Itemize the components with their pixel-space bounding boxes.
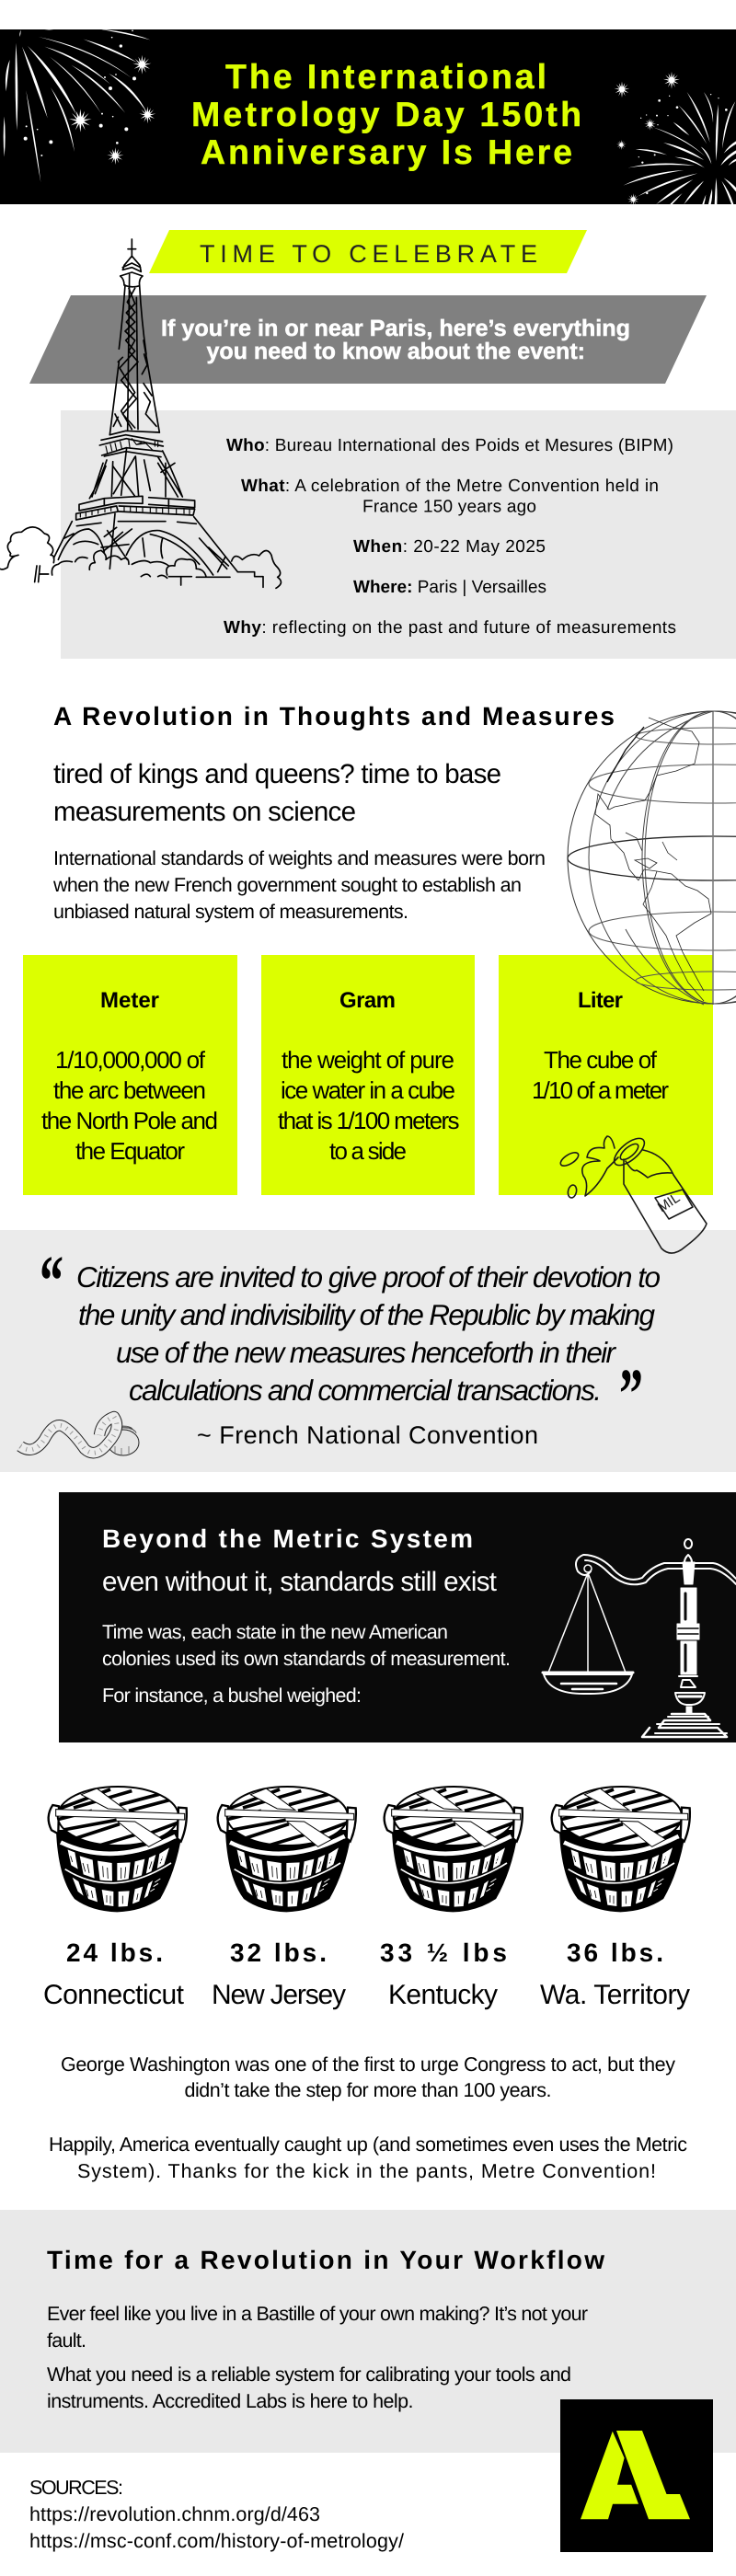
icon: milk bottle [558,1133,707,1253]
body text: Ever feel like you live in a Bastille of your own making? It’s not your [47,2303,588,2325]
icon: milk bottle: MIL [655,1190,683,1215]
body text: instruments. Accredited Labs is here to help. [47,2390,414,2412]
icon: basket new jersey [218,1787,356,1911]
card: meter: the Equator [75,1137,185,1165]
card: meter [23,955,237,1195]
washington territory [540,1938,690,2010]
latitude lines [568,728,736,990]
icon: basket connecticut [49,1787,187,1911]
new jersey: New Jersey [212,1980,346,2010]
quotation: Citizens are invited to give proof of their devotion to [76,1260,661,1294]
body text: fault. [47,2329,86,2352]
card: meter: the arc between [53,1076,206,1104]
icon: fireworks right [614,72,736,205]
icon: eiffel tower [0,239,281,588]
body text: International standards of weights and measures were born [53,847,546,869]
title: Anniversary Is Here [201,132,572,171]
icon: globe [568,711,736,1005]
card: meter: Meter [100,988,159,1013]
card: gram: Gram [339,988,396,1013]
card: gram: ice water in a cube [281,1076,455,1104]
card: gram: that is 1/100 meters [278,1107,460,1134]
panel: beyond the metric system [59,1492,736,1742]
card: liter: Liter [578,988,623,1013]
card: liter: The cube of [544,1046,658,1074]
text: george washington: didn’t take the step for more than 100 years. [184,2079,552,2101]
quotation: use of the new measures henceforth in their [116,1336,616,1369]
body text: Time was, each state in the new American [102,1621,448,1643]
text: george washington [49,2053,687,2182]
subheading [53,759,501,827]
heading: A Revolution in Thoughts and Measures [53,702,615,730]
card: gram: to a side [329,1137,407,1165]
banner: time to celebrate: TIME TO CELEBRATE [200,240,537,268]
quotation: the unity and indivisibility of the Republic by making [78,1298,655,1331]
connecticut: 24 lbs. [66,1938,163,1967]
what [241,477,659,517]
text: george washington: System). Thanks for the kick in the pants, Metre Convention! [77,2160,656,2182]
sources: https://msc-conf.com/history-of-metrology/ [29,2530,404,2552]
new jersey [212,1938,346,2010]
icon: fireworks left [4,29,155,182]
icon: basket washington territory [552,1787,690,1911]
body text [47,2303,588,2412]
sources [29,2477,404,2552]
kentucky: 33 ½ lbs [380,1938,507,1967]
what: What: A celebration of the Metre Convention held in [241,477,659,496]
text: george washington: George Washington was one of the first to urge Congress to act, but they [61,2053,675,2076]
sources: https://revolution.chnm.org/d/463 [29,2503,320,2525]
icon: basket kentucky [385,1787,523,1911]
icon: balance scale [543,1539,736,1737]
weights by state [43,1938,690,2010]
panel: event details [61,410,736,659]
attribution: ~ French National Convention [197,1421,538,1449]
bushel baskets [49,1787,690,1911]
connecticut [43,1938,185,2010]
banner: time to celebrate [149,230,587,273]
body text: What you need is a reliable system for calibrating your tools and [47,2363,571,2386]
body text [52,847,546,923]
card: meter: the North Pole and [41,1107,218,1134]
longitude lines [589,711,736,1005]
washington territory: 36 lbs. [567,1938,663,1967]
subheading: tired of kings and queens? time to base [53,759,501,789]
section: revolution in thoughts and measures [52,702,615,923]
connecticut: Connecticut [43,1980,185,2010]
card: liter: 1/10 of a meter [532,1076,669,1104]
washington territory: Wa. Territory [540,1980,690,2010]
title [191,57,581,171]
new jersey: 32 lbs. [230,1938,327,1967]
quotation [76,1260,661,1407]
banner: paris intro: If you’re in or near Paris, here’s everything [161,316,630,341]
logo: accredited labs [560,2399,713,2552]
sources: SOURCES: [29,2477,123,2499]
what: France 150 years ago [362,497,536,517]
card: gram [261,955,475,1195]
subheading: measurements on science [53,797,356,827]
body text: colonies used its own standards of measurement. [102,1648,511,1670]
kentucky [380,1938,507,2010]
who: Who: Bureau International des Poids et Mesures (BIPM) [226,436,673,455]
closing quote mark: ” [619,1353,643,1433]
title: The International [225,57,546,96]
why: Why: reflecting on the past and future of measurements [224,618,676,638]
banner: paris intro [29,295,707,384]
text: george washington: Happily, America eventually caught up (and sometimes even uses the Metric [49,2133,687,2156]
continents [595,718,711,1001]
where: Where: Paris | Versailles [353,578,546,597]
banner: paris intro: you need to know about the event: [206,339,585,364]
heading: Beyond the Metric System [102,1524,473,1553]
panel: workflow [0,2210,736,2453]
body text: unbiased natural system of measurements. [53,901,408,923]
body text [102,1621,511,1707]
kentucky: Kentucky [388,1980,498,2010]
opening quote mark: “ [40,1240,63,1320]
title: Metrology Day 150th [191,95,581,133]
card: meter: 1/10,000,000 of [55,1046,206,1074]
subheading: even without it, standards still exist [102,1567,497,1597]
header banner [0,29,736,205]
when: When: 20-22 May 2025 [353,537,546,557]
body text: when the new French government sought to establish an [52,874,522,896]
heading: Time for a Revolution in Your Workflow [47,2246,604,2274]
panel: quote [0,1230,736,1472]
quotation: calculations and commercial transactions. [129,1374,602,1407]
body text: For instance, a bushel weighed: [102,1685,362,1707]
icon: tape measure [20,1417,139,1455]
card: gram: the weight of pure [282,1046,454,1074]
card: liter [499,955,713,1195]
